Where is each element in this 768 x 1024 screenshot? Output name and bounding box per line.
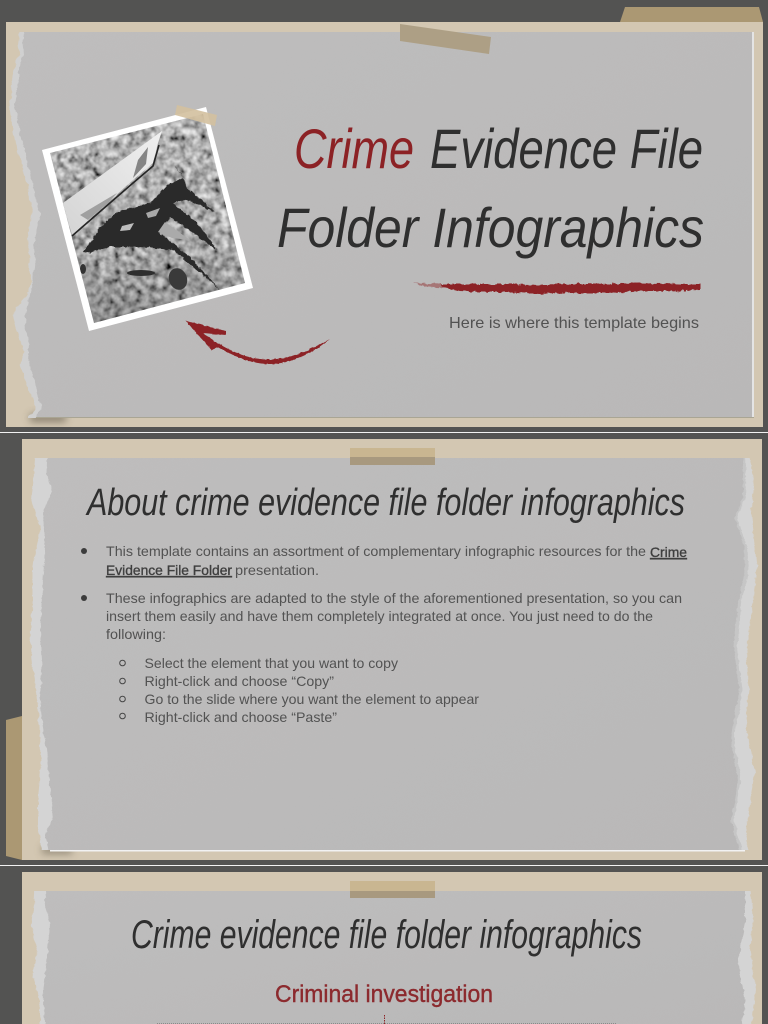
bullet list <box>81 543 687 642</box>
panel: slide 3 criminal investigation <box>22 872 762 1024</box>
tape top <box>350 881 435 898</box>
photo: knife and blood <box>40 105 255 335</box>
sub list: Select the element that you want to copy <box>144 655 398 671</box>
divider 2 <box>0 865 768 866</box>
title <box>277 117 704 259</box>
tape top <box>400 24 491 54</box>
paper shadow <box>30 414 66 422</box>
panel: slide 1 title <box>6 7 763 427</box>
folder tab top right <box>620 7 763 22</box>
folder tab left <box>6 716 22 860</box>
subtitle: Here is where this template begins <box>449 315 699 332</box>
torn paper <box>30 450 757 858</box>
subheading: Criminal investigation <box>275 981 493 1008</box>
torn paper <box>9 24 760 426</box>
title: Crime <box>294 117 414 180</box>
paper shadow <box>42 846 72 854</box>
panel: slide 2 about <box>6 439 762 860</box>
bullet list: Evidence File Folder <box>106 562 232 578</box>
sub list <box>120 655 479 725</box>
sub list: Right-click and choose “Paste” <box>144 709 337 725</box>
blood <box>83 162 220 290</box>
title: Evidence File <box>430 117 703 180</box>
bullet list: insert them easily and have them completely integrated at once. You just need to do the <box>106 608 653 624</box>
tree connector <box>157 1015 617 1024</box>
folder body <box>22 439 762 860</box>
paper bottom highlight <box>50 850 745 852</box>
bullet list: following: <box>106 626 166 642</box>
bullet list: Crime <box>650 544 687 560</box>
torn paper <box>31 884 756 1024</box>
bullet list: These infographics are adapted to the style of the aforementioned presentation, so you can <box>106 590 682 606</box>
tape top <box>350 448 435 465</box>
folder body <box>22 872 762 1024</box>
title: Folder Infographics <box>277 196 704 259</box>
small tape on photo <box>175 105 217 126</box>
divider 1 <box>0 432 768 433</box>
red brush underline <box>413 283 700 294</box>
arrow <box>186 321 330 364</box>
bullet list: presentation. <box>235 562 319 578</box>
folder body <box>6 22 763 427</box>
knife <box>63 131 162 235</box>
sub list: Go to the slide where you want the element to appear <box>144 691 479 707</box>
sub list: Right-click and choose “Copy” <box>144 673 334 689</box>
bullet list: This template contains an assortment of complementary infographic resources for the <box>106 543 646 559</box>
